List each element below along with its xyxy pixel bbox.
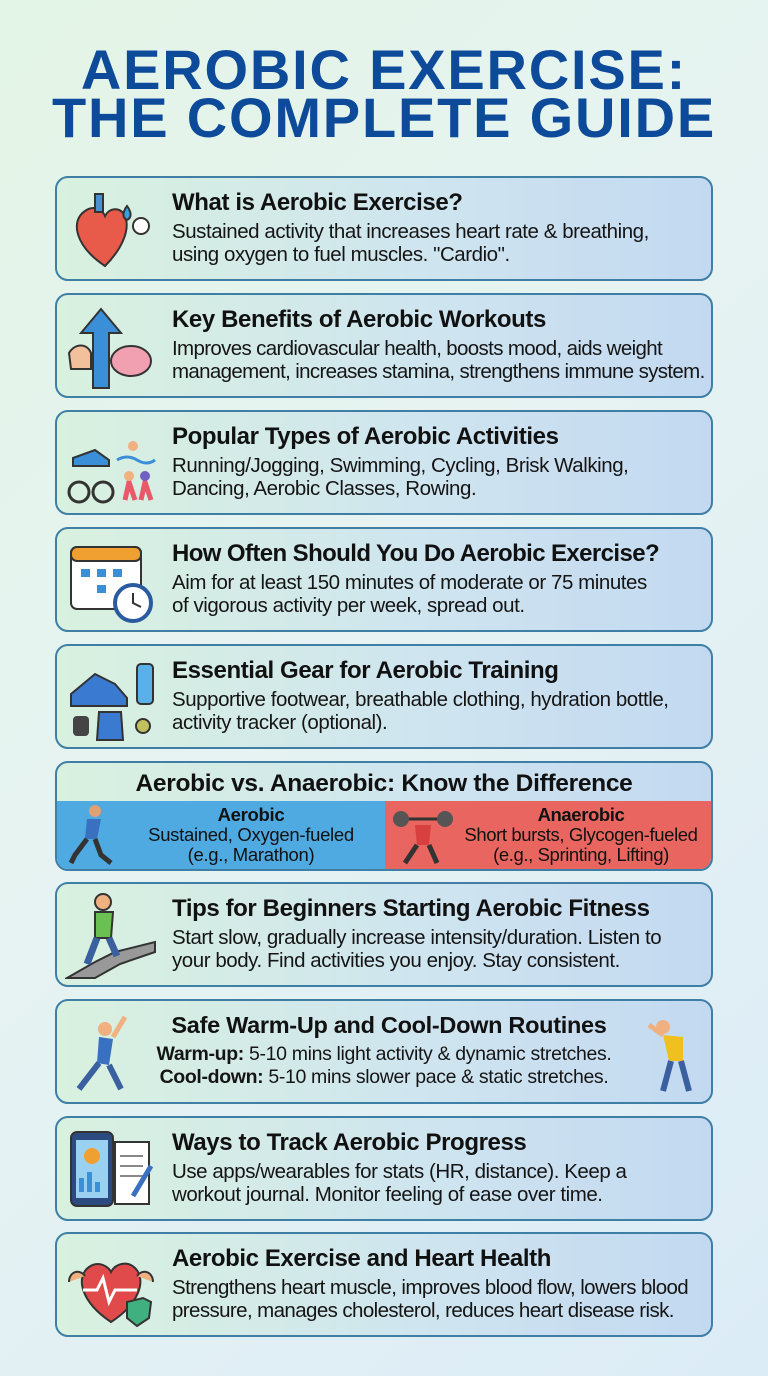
icon: calendar clock [70,546,153,623]
panel: benefits [55,293,713,398]
panel: benefits: management, increases stamina, strengthens immune system. [172,360,705,383]
panel: what is: Sustained activity that increases heart rate & breathing, [172,220,649,243]
panel: track progress: workout journal. Monitor feeling of ease over time. [172,1183,603,1206]
panel: gear [55,644,713,749]
panel: gear: activity tracker (optional). [172,711,387,734]
panel: aerobic side: Sustained, Oxygen-fueled [148,824,354,845]
panel: track progress: Ways to Track Aerobic Progress [172,1129,526,1156]
panel: what is [55,176,713,281]
panel: heart health: Aerobic Exercise and Heart Health [172,1245,551,1272]
icon: stretch left [76,1016,128,1091]
icon: activities [68,441,156,504]
panel: types: Running/Jogging, Swimming, Cycling, Brisk Walking, [172,454,628,477]
panel: tips: Start slow, gradually increase intensity/duration. Listen to [172,926,661,949]
panel: anaerobic side: Short bursts, Glycogen-fueled [464,824,698,845]
icon: heart [76,193,150,268]
panel: gear: Essential Gear for Aerobic Training [172,657,559,684]
text: warm-up: Cool-down: 5-10 mins slower pace & static stretches. [160,1066,608,1088]
title: THE COMPLETE GUIDE [52,86,716,149]
panel: aerobic side [57,801,385,873]
panel: benefits: Improves cardiovascular health, boosts mood, aids weight [172,337,662,360]
panel: benefits: Key Benefits of Aerobic Workouts [172,306,546,333]
panel: tips: your body. Find activities you enjoy. Stay consistent. [172,949,620,972]
panel: how often: Aim for at least 150 minutes of moderate or 75 minutes [172,571,647,594]
panel: aerobic side: Aerobic [218,804,284,825]
panel: anaerobic side: Anaerobic [538,804,624,825]
panel: what is: What is Aerobic Exercise? [172,189,463,216]
panel: how often: How Often Should You Do Aerobic Exercise? [172,540,659,567]
panel: track progress [55,1116,713,1221]
panel: heart health: Strengthens heart muscle, improves blood flow, lowers blood [172,1276,688,1299]
icon: gear [70,663,154,741]
panel: anaerobic side: (e.g., Sprinting, Lifting) [493,844,669,865]
icon: arrow muscle brain [68,308,152,389]
panel: aerobic vs anaerobic [55,761,713,871]
panel: types: Popular Types of Aerobic Activities [172,423,559,450]
panel: how often [55,527,713,632]
panel: warm-up [55,999,713,1104]
text: warm-up [156,1043,612,1088]
icon: runner [68,805,112,865]
heading: comparison: Aerobic vs. Anaerobic: Know the Difference [135,770,633,797]
title [52,38,716,149]
icon: phone journal [70,1131,154,1207]
panel: aerobic side: (e.g., Marathon) [188,844,314,865]
panel: track progress: Use apps/wearables for stats (HR, distance). Keep a [172,1160,626,1183]
icon: lifter [393,811,453,864]
icon: stretch right [648,1020,692,1092]
heading: warm-up: Safe Warm-Up and Cool-Down Routines [171,1012,607,1038]
panel: types [55,410,713,515]
text: warm-up: Warm-up: 5-10 mins light activity & dynamic stretches. [156,1043,612,1065]
panel: heart health: pressure, manages cholesterol, reduces heart disease risk. [172,1299,674,1322]
panel: anaerobic side [385,801,715,873]
icon: heart shield [68,1262,154,1328]
panel: what is: using oxygen to fuel muscles. "Cardio". [172,243,510,266]
panel: types: Dancing, Aerobic Classes, Rowing. [172,477,476,500]
icon: walker on path [65,893,156,979]
panel: gear: Supportive footwear, breathable clothing, hydration bottle, [172,688,669,711]
panel: heart health [55,1232,713,1337]
panel: tips [55,882,713,987]
panel: how often: of vigorous activity per week, spread out. [172,594,525,617]
title: AEROBIC EXERCISE: [81,38,687,101]
panel: tips: Tips for Beginners Starting Aerobic Fitness [172,895,650,922]
